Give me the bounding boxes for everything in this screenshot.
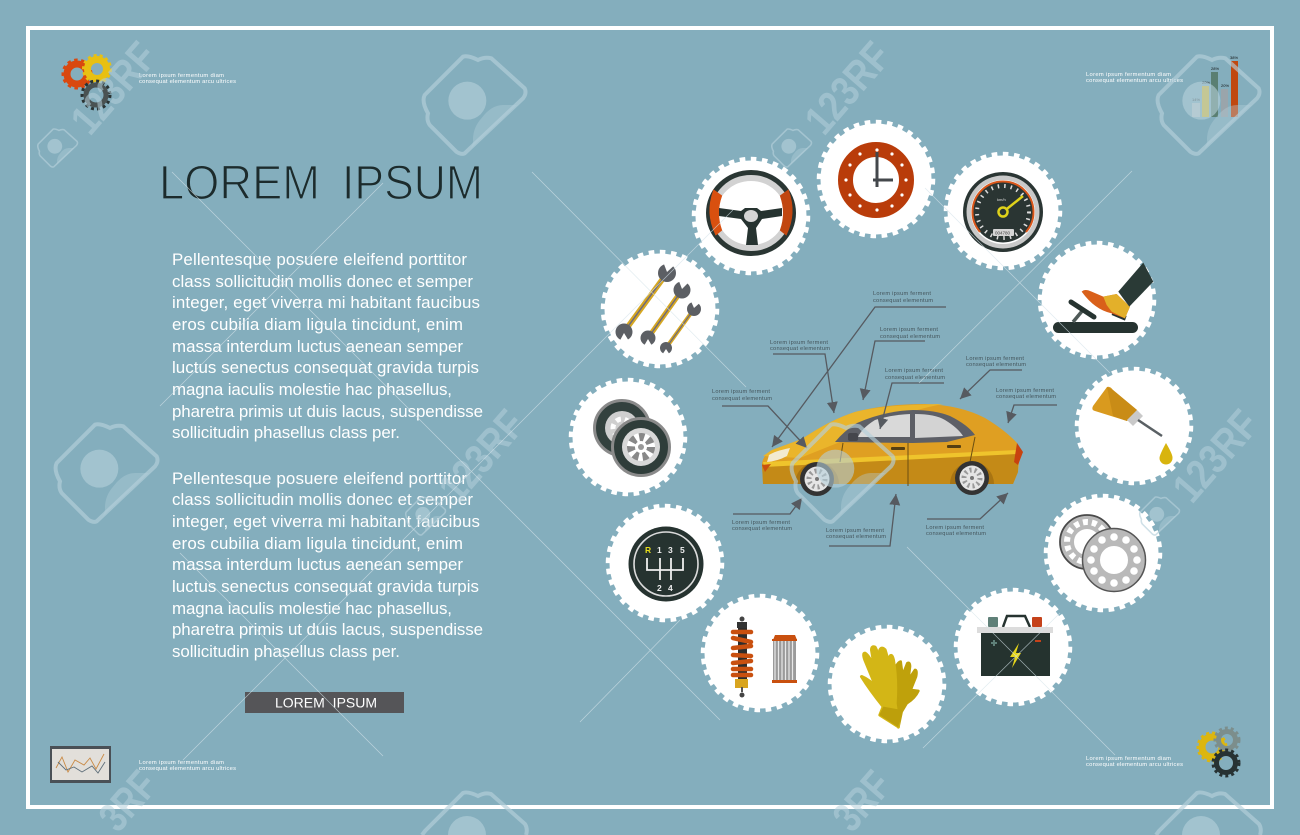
icon: bottom-right gears — [1198, 728, 1239, 776]
callout: B: Lorem ipsum ferment — [880, 327, 938, 333]
callout: D — [880, 368, 945, 429]
callout: G — [712, 389, 807, 448]
callout: H: Lorem ipsum ferment — [732, 520, 790, 526]
bar chart: top-right: 20% — [1221, 83, 1229, 88]
icon: monitor chart — [50, 746, 111, 783]
callout: A — [772, 291, 946, 447]
bar chart: top-right: 20% — [1202, 80, 1210, 85]
text: top-left caption: Lorem ipsum fermentum diam — [139, 73, 224, 79]
text: top-right caption: consequat elementum arcu ultrices — [1086, 78, 1183, 84]
title: IPSUM — [342, 157, 483, 210]
text: bottom-right caption: Lorem ipsum fermentum diam — [1086, 756, 1171, 762]
bar chart: top-right — [1192, 55, 1238, 117]
text: bottom-left caption — [139, 760, 236, 772]
gear: wrenches — [603, 252, 717, 366]
icon: wrenches — [616, 259, 702, 358]
text: top-left caption — [139, 73, 236, 85]
callout: A: Lorem ipsum ferment — [873, 291, 931, 297]
icon: gear shifter knob: 1 — [657, 545, 662, 555]
title: LOREM — [159, 157, 320, 210]
icon: oil can — [1092, 387, 1173, 464]
text: bottom-right caption — [1086, 756, 1183, 768]
text block: first paragraph — [172, 250, 483, 442]
text block: first paragraph: massa interdum luctus aenean semper — [172, 337, 463, 356]
callout: B — [863, 327, 940, 400]
callout: G: Lorem ipsum ferment — [712, 389, 770, 395]
text: bottom-right caption: consequat elementum arcu ultrices — [1086, 762, 1183, 768]
gear: battery — [956, 590, 1070, 704]
text: bottom-left caption: consequat elementum arcu ultrices — [139, 766, 236, 772]
callout: C: consequat elementum — [770, 346, 830, 352]
callout: H — [732, 498, 802, 532]
callout: J — [926, 493, 1008, 537]
icon: car battery — [977, 616, 1053, 676]
callout: D: Lorem ipsum ferment — [885, 368, 943, 374]
text block: second paragraph: sollicitudin phasellus class per. — [172, 642, 400, 661]
icon: gear shifter knob — [628, 526, 704, 602]
text block: second paragraph: luctus senectus consequat gravida turpis — [172, 577, 479, 596]
callout: J: Lorem ipsum ferment — [926, 525, 984, 531]
text block: second paragraph: class sollicitudin mollis donec et semper — [172, 490, 473, 509]
gear: gloves — [830, 627, 944, 741]
text: bottom-left caption: Lorem ipsum fermentum diam — [139, 760, 224, 766]
icon: ball bearings — [1060, 515, 1146, 592]
text block: second paragraph: magna iaculis molestie hac phasellus, — [172, 599, 452, 618]
button: LOREM IPSUM — [275, 694, 377, 710]
callout: E — [960, 356, 1026, 399]
gear: pedal — [1040, 243, 1154, 357]
bar chart: top-right: 28% — [1211, 66, 1219, 71]
watermark: 123RF — [61, 33, 166, 143]
icon: gear shifter knob: 3 — [668, 545, 673, 555]
callout: A: consequat elementum — [873, 298, 933, 304]
icon: pair of tires — [594, 400, 670, 476]
icon: gear shifter knob: 2 — [657, 583, 662, 593]
text block: second paragraph: eros cubilia diam ligula tincidunt, enim — [172, 534, 463, 553]
icon: gloves — [862, 647, 918, 727]
callout: F: Lorem ipsum ferment — [996, 388, 1054, 394]
text block: second paragraph — [172, 469, 483, 661]
icon: speedometer: km/h — [997, 197, 1006, 202]
bar chart: top-right: 14% — [1192, 97, 1200, 102]
text block: first paragraph: class sollicitudin mollis donec et semper — [172, 272, 473, 291]
text: top-right caption — [1086, 72, 1183, 84]
text block: second paragraph: Pellentesque posuere eleifend porttitor — [172, 469, 467, 488]
text block: first paragraph: Pellentesque posuere eleifend porttitor — [172, 250, 467, 269]
icon: gear shifter knob: R — [645, 545, 651, 555]
text block: first paragraph: eros cubilia diam ligula tincidunt, enim — [172, 315, 463, 334]
icon: foot on pedal — [1053, 263, 1153, 333]
text: top-left caption: consequat elementum arcu ultrices — [139, 79, 236, 85]
callout: E: consequat elementum — [966, 362, 1026, 368]
text block: second paragraph: massa interdum luctus aenean semper — [172, 555, 463, 574]
callout: I: consequat elementum — [826, 534, 886, 540]
car — [762, 404, 1023, 496]
callout: H: consequat elementum — [732, 526, 792, 532]
gear: steering wheel — [694, 159, 808, 273]
gear: shock absorber — [703, 596, 817, 710]
callout: C — [770, 340, 834, 413]
gear: bearings — [1046, 496, 1160, 610]
text block: first paragraph: integer, eget viverra mi habitant faucibus — [172, 293, 480, 312]
callout: F — [996, 388, 1057, 423]
callout: J: consequat elementum — [926, 531, 986, 537]
gear: speedometer — [946, 154, 1060, 268]
text block: first paragraph: pharetra primis ut duis lacus, suspendisse — [172, 402, 483, 421]
gear: gear shifter — [608, 506, 722, 620]
text block: first paragraph: luctus senectus consequat gravida turpis — [172, 358, 479, 377]
button — [245, 692, 404, 713]
callout: D: consequat elementum — [885, 375, 945, 381]
watermark: 123RF — [429, 401, 534, 511]
text: top-right caption: Lorem ipsum fermentum diam — [1086, 72, 1171, 78]
text block: first paragraph: sollicitudin phasellus class per. — [172, 423, 400, 442]
icon: steering wheel — [709, 173, 793, 253]
callout: B: consequat elementum — [880, 334, 940, 340]
icon: clock — [844, 148, 908, 212]
text block: second paragraph: integer, eget viverra mi habitant faucibus — [172, 512, 480, 531]
title — [159, 157, 483, 210]
icon: speedometer — [963, 172, 1043, 252]
gear: tires — [571, 380, 685, 494]
icon: gear shifter knob: 4 — [668, 583, 673, 593]
text block: first paragraph: magna iaculis molestie hac phasellus, — [172, 380, 452, 399]
text block: second paragraph: pharetra primis ut duis lacus, suspendisse — [172, 620, 483, 639]
callout: F: consequat elementum — [996, 394, 1056, 400]
icon: speedometer: 004780 — [995, 230, 1011, 236]
icon: shock absorber and filter — [733, 616, 797, 698]
callout: G: consequat elementum — [712, 396, 772, 402]
callout: C: Lorem ipsum ferment — [770, 340, 828, 346]
gear: clock — [819, 122, 933, 236]
callout: I — [826, 494, 896, 546]
bar chart: top-right: 38% — [1230, 55, 1238, 60]
callout: I: Lorem ipsum ferment — [826, 528, 884, 534]
icon: top-left gears — [63, 56, 110, 109]
gear: oil can — [1077, 369, 1191, 483]
callout: E: Lorem ipsum ferment — [966, 356, 1024, 362]
icon: gear shifter knob: 5 — [680, 545, 685, 555]
watermark: 123RF — [795, 33, 900, 143]
watermark: 123RF — [1163, 401, 1268, 511]
